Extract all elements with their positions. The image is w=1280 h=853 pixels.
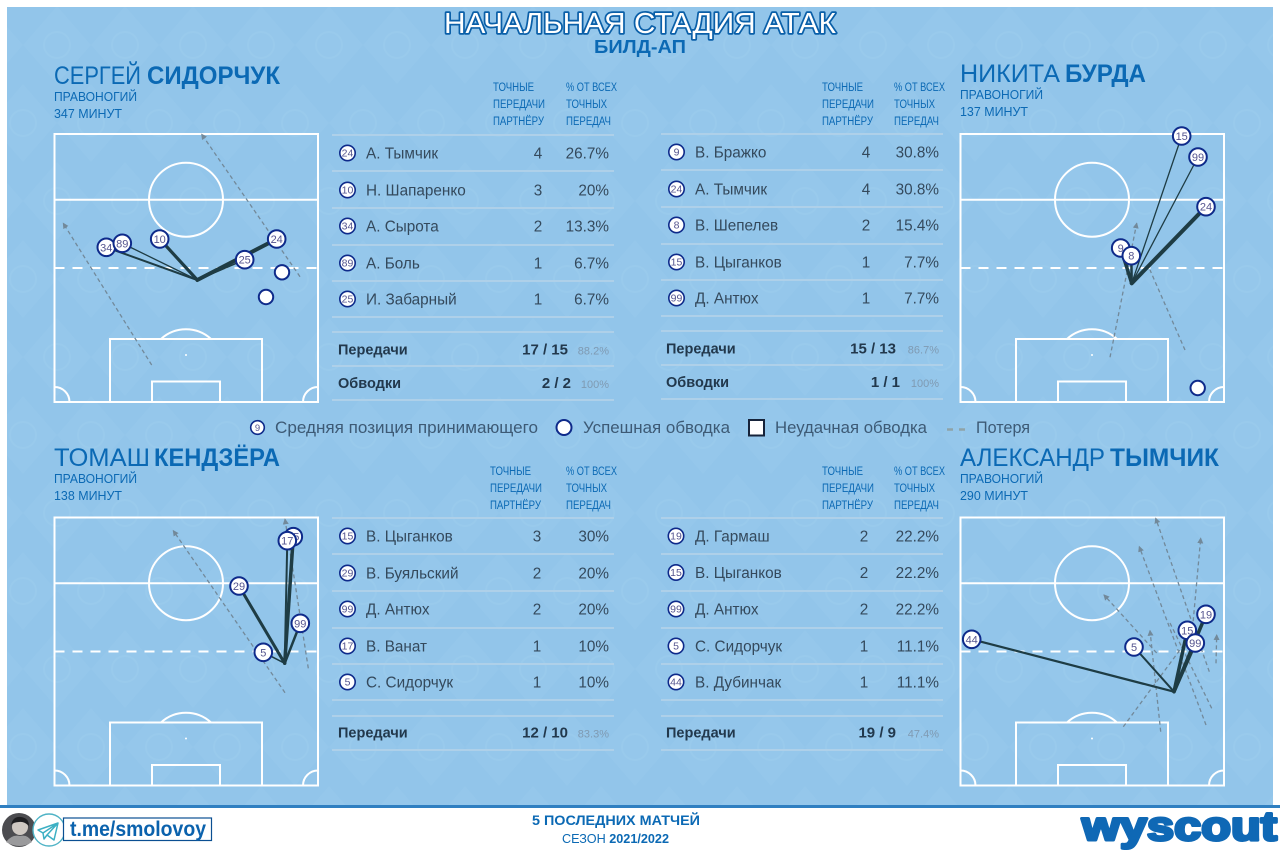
legend: failed dribble: Неудачная обводка bbox=[775, 419, 928, 437]
passes table: И. Забарный bbox=[366, 292, 457, 308]
pitch chart: 5 bbox=[260, 647, 266, 659]
pitch chart bbox=[54, 518, 318, 786]
passes table: ТОЧНЫЕ bbox=[822, 82, 863, 94]
passes table: ПЕРЕДАЧИ bbox=[493, 99, 545, 111]
passes table: ПЕРЕДАЧИ bbox=[490, 483, 542, 495]
passes table: Передачи bbox=[338, 342, 408, 358]
passes table: ПАРТНЁРУ bbox=[822, 500, 874, 512]
player heading: СЕРГЕЙ bbox=[54, 60, 141, 90]
passes table: Н. Шапаренко bbox=[366, 182, 466, 200]
passes table: ПЕРЕДАЧ bbox=[894, 500, 939, 512]
passes table: 20% bbox=[578, 182, 609, 200]
player heading: ПРАВОНОГИЙ bbox=[54, 89, 137, 104]
pitch chart: 34 bbox=[100, 242, 112, 254]
player heading: 290 МИНУТ bbox=[960, 488, 1028, 503]
passes table: 11.1% bbox=[897, 638, 939, 656]
panel: Тымчик bbox=[661, 444, 1224, 786]
passes table: 2 / 2 bbox=[542, 375, 571, 392]
passes table: В. Цыганков bbox=[695, 565, 782, 582]
passes table: Передачи bbox=[338, 726, 408, 742]
passes table: ТОЧНЫЕ bbox=[490, 466, 531, 478]
passes table: 2 bbox=[533, 566, 541, 582]
player heading: КЕНДЗЁРА bbox=[154, 444, 280, 472]
passes table: 1 bbox=[862, 254, 870, 272]
passes table: Д. Гармаш bbox=[695, 528, 770, 546]
passes table: 5 bbox=[345, 677, 351, 689]
legend: successful dribble: Успешная обводка bbox=[583, 419, 731, 437]
passes table: ТОЧНЫХ bbox=[566, 99, 607, 111]
passes table: 99 bbox=[342, 604, 353, 616]
passes table: 4 bbox=[862, 182, 871, 198]
passes table: В. Бражко bbox=[695, 144, 766, 162]
passes table: 15.4% bbox=[896, 218, 939, 234]
pitch chart: 15 bbox=[287, 532, 299, 544]
logo: wyscout: wyscout bbox=[1081, 803, 1277, 849]
pitch chart: 9 bbox=[1118, 243, 1124, 255]
passes table: А. Боль bbox=[366, 256, 420, 272]
passes table: 19 bbox=[670, 531, 682, 543]
passes table: 29 bbox=[342, 568, 353, 580]
passes table: В. Цыганков bbox=[366, 528, 453, 546]
passes table: 6.7% bbox=[574, 256, 609, 272]
passes table: А. Сырота bbox=[366, 218, 439, 236]
passes table: Обводки bbox=[666, 375, 729, 391]
panel: Бурда bbox=[661, 60, 1224, 402]
pitch chart: 99 bbox=[1189, 638, 1201, 650]
player heading: ТОМАШ bbox=[54, 444, 150, 472]
player heading: 137 МИНУТ bbox=[960, 104, 1028, 119]
legend: loss: Потеря bbox=[976, 419, 1030, 437]
pitch chart: 99 bbox=[1192, 152, 1204, 164]
pitch chart: 99 bbox=[294, 618, 306, 630]
player heading: АЛЕКСАНДР bbox=[960, 444, 1105, 472]
passes table bbox=[661, 82, 945, 399]
passes table: 15 bbox=[670, 567, 682, 579]
player heading: ТЫМЧИК bbox=[1110, 444, 1220, 472]
passes table: % ОТ ВСЕХ bbox=[894, 466, 945, 478]
passes table: 15 bbox=[671, 257, 682, 269]
pitch chart: 19 bbox=[1200, 609, 1212, 621]
passes table: 13.3% bbox=[566, 218, 609, 236]
legend: receiver position: Средняя позиция принимающего bbox=[275, 419, 538, 437]
passes table: 19 / 9 bbox=[858, 724, 896, 742]
passes table: 1 bbox=[534, 256, 542, 272]
pitch chart bbox=[960, 127, 1224, 402]
passes table: 10% bbox=[578, 638, 609, 656]
passes table: 2 bbox=[860, 528, 868, 546]
passes table: 4 bbox=[534, 146, 543, 162]
passes table: 30.8% bbox=[896, 144, 939, 162]
passes table: ПЕРЕДАЧ bbox=[894, 116, 939, 128]
passes table: 24 bbox=[671, 184, 682, 196]
passes table: Передачи bbox=[666, 342, 736, 358]
passes table: ПЕРЕДАЧ bbox=[566, 116, 611, 128]
passes table: 5 bbox=[673, 641, 679, 653]
footer: period caption bbox=[532, 811, 700, 846]
passes table: Д. Антюх bbox=[366, 602, 430, 618]
passes table: % ОТ ВСЕХ bbox=[894, 82, 945, 94]
passes table: В. Ванат bbox=[366, 638, 427, 656]
passes table: В. Буяльский bbox=[366, 566, 458, 582]
passes table: 1 / 1 bbox=[871, 374, 900, 391]
passes table: 100% bbox=[581, 379, 609, 391]
passes table: Д. Антюх bbox=[695, 290, 759, 308]
pitch chart bbox=[960, 518, 1224, 786]
passes table: 3 bbox=[534, 182, 542, 200]
passes table: 15 / 13 bbox=[850, 340, 896, 358]
passes table: 1 bbox=[533, 674, 541, 692]
pitch chart: 25 bbox=[239, 255, 251, 267]
passes table: 7.7% bbox=[904, 290, 939, 308]
player heading: НИКИТА bbox=[960, 60, 1060, 88]
pitch chart: 44 bbox=[966, 634, 978, 646]
passes table: 22.2% bbox=[896, 528, 939, 546]
passes table: В. Цыганков bbox=[695, 254, 782, 272]
passes table: 2 bbox=[533, 602, 541, 618]
footer: author badge bbox=[2, 813, 212, 847]
passes table: Д. Антюх bbox=[695, 602, 759, 618]
passes table: 7.7% bbox=[904, 254, 939, 272]
passes table: 1 bbox=[860, 674, 868, 692]
passes table: 6.7% bbox=[574, 292, 609, 308]
passes table: ТОЧНЫХ bbox=[894, 483, 935, 495]
telegram link: t.me/smolovoy bbox=[70, 818, 206, 841]
player heading bbox=[54, 60, 281, 121]
passes table: Обводки bbox=[338, 376, 401, 392]
icon: author photo bbox=[2, 813, 36, 847]
pitch chart: 24 bbox=[1200, 202, 1212, 214]
passes table bbox=[332, 466, 617, 750]
passes table: 99 bbox=[671, 293, 682, 305]
passes table: 4 bbox=[862, 144, 871, 162]
pitch chart: 15 bbox=[1176, 131, 1188, 143]
panel: Кендзёра bbox=[54, 444, 617, 786]
passes table: 2 bbox=[534, 218, 542, 236]
passes table: 1 bbox=[862, 290, 870, 308]
passes table: 34 bbox=[342, 221, 353, 233]
title: НАЧАЛЬНАЯ СТАДИЯ АТАК bbox=[444, 8, 836, 40]
passes table: С. Сидорчук bbox=[366, 674, 453, 692]
passes table bbox=[661, 466, 945, 750]
legend bbox=[251, 419, 1030, 437]
passes table: 20% bbox=[578, 566, 609, 582]
passes table: ТОЧНЫХ bbox=[566, 483, 607, 495]
passes table: А. Тымчик bbox=[695, 182, 767, 198]
passes table: 11.1% bbox=[897, 674, 939, 692]
pitch chart: 17 bbox=[281, 536, 293, 548]
passes table: ТОЧНЫЕ bbox=[822, 466, 863, 478]
player heading: ПРАВОНОГИЙ bbox=[960, 471, 1043, 486]
passes table: А. Тымчик bbox=[366, 146, 438, 162]
player heading bbox=[960, 444, 1220, 503]
passes table: 10 bbox=[342, 185, 353, 197]
passes table: 99 bbox=[670, 604, 682, 616]
passes table bbox=[332, 82, 617, 400]
passes table: 86.7% bbox=[908, 344, 939, 356]
passes table: 30.8% bbox=[896, 182, 939, 198]
footer divider bbox=[0, 805, 1280, 808]
passes table: 44 bbox=[670, 677, 682, 689]
player heading: ПРАВОНОГИЙ bbox=[960, 87, 1043, 102]
passes table: 12 / 10 bbox=[522, 724, 568, 742]
passes table: В. Дубинчак bbox=[695, 674, 781, 692]
player heading: 138 МИНУТ bbox=[54, 488, 122, 503]
passes table: 2 bbox=[860, 565, 868, 582]
pitch chart bbox=[54, 134, 318, 402]
passes table: С. Сидорчук bbox=[695, 638, 782, 656]
passes table: ПЕРЕДАЧ bbox=[566, 500, 611, 512]
passes table: 1 bbox=[860, 638, 868, 656]
passes table: 9 bbox=[674, 147, 680, 159]
player heading: БУРДА bbox=[1065, 60, 1146, 88]
passes table: ПЕРЕДАЧИ bbox=[822, 483, 874, 495]
passes table: ПАРТНЁРУ bbox=[822, 116, 874, 128]
passes table: ТОЧНЫЕ bbox=[493, 82, 534, 94]
player heading bbox=[960, 60, 1146, 119]
passes table: 17 / 15 bbox=[522, 342, 568, 358]
passes table: ПАРТНЁРУ bbox=[490, 500, 542, 512]
pitch chart: 24 bbox=[271, 234, 283, 246]
passes table: 1 bbox=[534, 292, 542, 308]
passes table: 47.4% bbox=[908, 728, 939, 740]
passes table: 22.2% bbox=[896, 602, 939, 618]
pitch chart: 29 bbox=[233, 581, 245, 593]
passes table: 100% bbox=[911, 378, 939, 390]
player heading: ПРАВОНОГИЙ bbox=[54, 471, 137, 486]
passes table: ТОЧНЫХ bbox=[894, 99, 935, 111]
passes table: 30% bbox=[578, 528, 609, 546]
passes table: В. Шепелев bbox=[695, 218, 778, 234]
pitch chart: 5 bbox=[1131, 642, 1137, 654]
passes table: 3 bbox=[533, 528, 541, 546]
footer: period caption: 5 ПОСЛЕДНИХ МАТЧЕЙ bbox=[532, 811, 700, 828]
passes table: 2 bbox=[860, 602, 868, 618]
player heading bbox=[54, 444, 280, 503]
passes table: 26.7% bbox=[566, 146, 609, 162]
pitch chart: 8 bbox=[1128, 251, 1134, 263]
passes table: ПЕРЕДАЧИ bbox=[822, 99, 874, 111]
passes table: 10% bbox=[578, 674, 609, 692]
legend: loss bbox=[947, 419, 1030, 437]
subtitle: БИЛД-АП bbox=[594, 37, 686, 57]
player heading: 347 МИНУТ bbox=[54, 106, 122, 121]
player heading: СИДОРЧУК bbox=[147, 62, 281, 90]
pitch chart: 15 bbox=[1181, 625, 1193, 637]
passes table: % ОТ ВСЕХ bbox=[566, 466, 617, 478]
passes table: % ОТ ВСЕХ bbox=[566, 82, 617, 94]
passes table: 25 bbox=[342, 294, 353, 306]
passes table: 22.2% bbox=[896, 565, 939, 582]
legend: receiver position: 9 bbox=[255, 423, 260, 434]
panel: Сидорчук bbox=[54, 60, 617, 402]
footer: period caption: СЕЗОН 2021/2022 bbox=[562, 832, 669, 846]
passes table: 24 bbox=[342, 148, 353, 160]
passes table: 15 bbox=[342, 531, 353, 543]
passes table: Передачи bbox=[666, 726, 736, 742]
passes table: 1 bbox=[533, 638, 541, 656]
passes table: 8 bbox=[674, 220, 680, 232]
passes table: 20% bbox=[578, 602, 609, 618]
passes table: 2 bbox=[862, 218, 870, 234]
passes table: 89 bbox=[342, 258, 353, 270]
pitch chart: 89 bbox=[116, 238, 128, 250]
passes table: 83.3% bbox=[578, 728, 609, 740]
passes table: 17 bbox=[342, 641, 353, 653]
pitch chart: 10 bbox=[154, 234, 166, 246]
passes table: ПАРТНЁРУ bbox=[493, 116, 545, 128]
passes table: 88.2% bbox=[578, 346, 609, 358]
icon: telegram bbox=[33, 814, 65, 846]
